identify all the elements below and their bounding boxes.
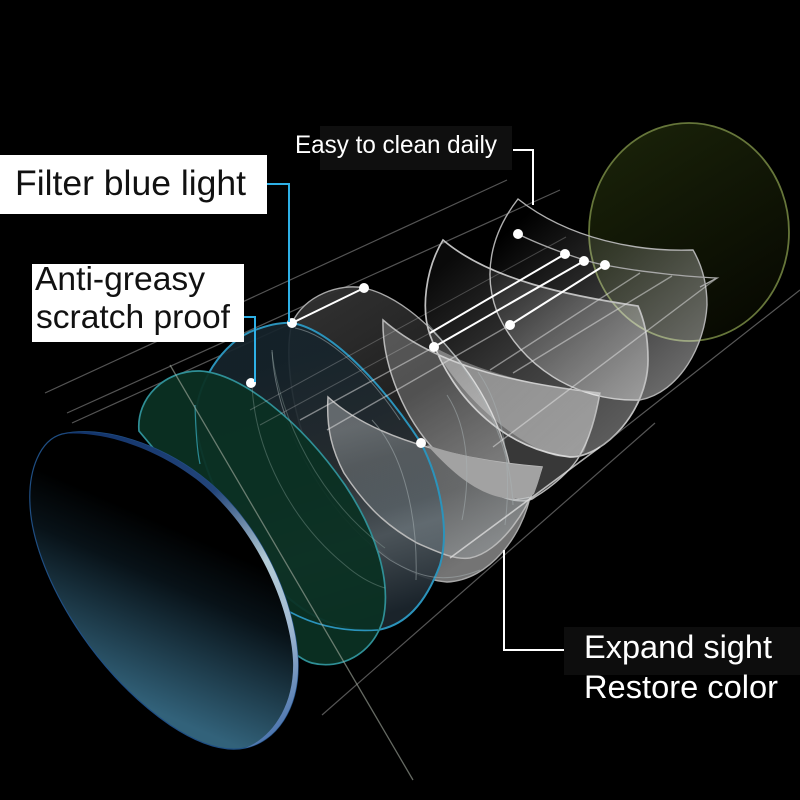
lens: second petal: [383, 320, 600, 501]
label: expand sight restore color: Expand sight: [584, 629, 772, 665]
leader: anti-greasy: [243, 317, 255, 382]
guide lines behind lenses: [45, 180, 655, 715]
light rays through lenses: [300, 273, 717, 447]
lens: green anti-grease layer: [139, 371, 385, 665]
bright edge guide line: [450, 290, 800, 558]
leader: filter blue light: [266, 184, 289, 322]
crossing guide line: [170, 365, 413, 780]
lens: grey layer: [289, 287, 530, 582]
marker dots: [246, 229, 610, 448]
faint ray across filter lens: [250, 237, 566, 425]
lens: olive back layer: [589, 123, 789, 341]
filter lens outline: [196, 323, 444, 630]
leader: expand sight: [504, 550, 565, 650]
outer curved edge through dots: [518, 234, 717, 287]
label: expand sight restore color: [564, 627, 800, 705]
label: expand sight restore color: Restore color: [584, 669, 778, 705]
inner lens arcs: [272, 323, 513, 580]
lens: blue-filter layer: [196, 323, 444, 630]
label: anti-greasy scratch proof: [32, 260, 244, 342]
white connector beams: [292, 254, 605, 347]
label: anti-greasy scratch proof: scratch proof: [36, 298, 231, 335]
lens: front petal: [328, 397, 542, 558]
label: easy to clean daily: Easy to clean daily: [295, 131, 497, 159]
leader: easy to clean: [513, 150, 533, 205]
lens: third petal: [425, 240, 648, 457]
label: filter blue light: Filter blue light: [15, 164, 246, 203]
lens: front blue lens: [30, 432, 298, 749]
label: filter blue light: [0, 155, 267, 214]
lens: clean-coating petal: [490, 199, 707, 400]
green layer inner arcs: [178, 352, 385, 620]
label: easy to clean daily: [295, 126, 512, 170]
label: anti-greasy scratch proof: Anti-greasy: [35, 260, 206, 297]
